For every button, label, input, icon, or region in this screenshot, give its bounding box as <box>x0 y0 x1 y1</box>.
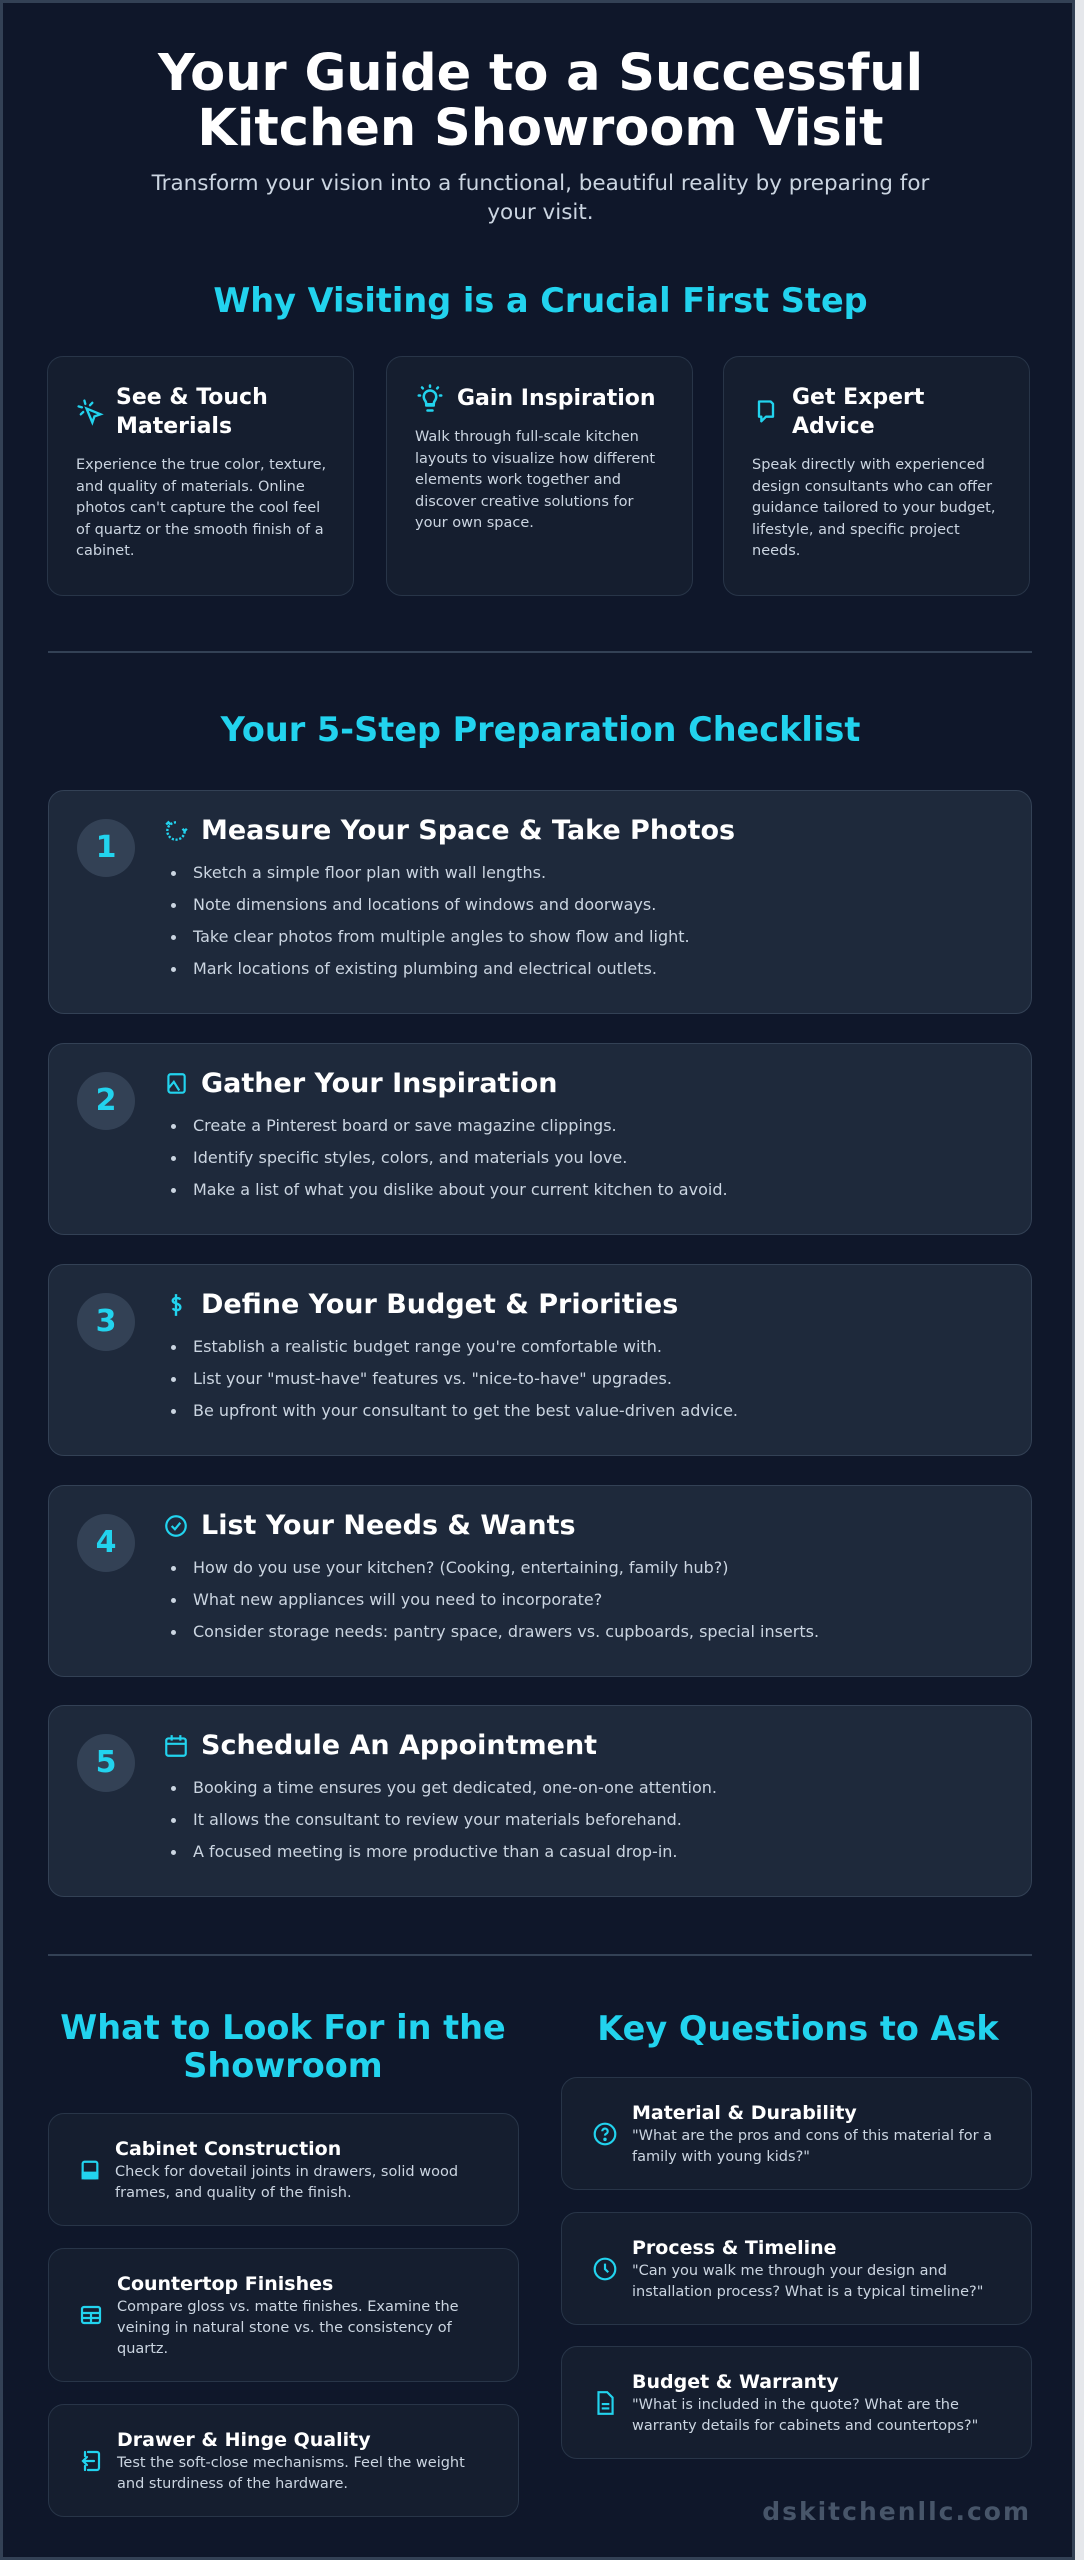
step 1: 1 <box>96 830 116 865</box>
card: expert advice <box>723 356 1030 596</box>
step 3: Establish a realistic budget range you're comfortable with. <box>193 1337 662 1356</box>
icon: enter <box>82 2450 100 2472</box>
look card: drawer: Test the soft-close mechanisms. Feel the weight and sturdiness of the hardware. <box>117 2454 465 2492</box>
heading: what to look for: What to Look For in the Showroom <box>60 2008 506 2085</box>
look card: drawer: Drawer & Hinge Quality <box>117 2428 371 2450</box>
step 1: Sketch a simple floor plan with wall lengths. <box>193 863 546 882</box>
footer: website: dskitchenllc.com <box>762 2497 1031 2526</box>
step 4: How do you use your kitchen? (Cooking, entertaining, family hub?) <box>193 1558 729 1577</box>
step 4: 4 <box>96 1525 116 1560</box>
question card: process <box>561 2212 1032 2325</box>
icon: cabinet <box>82 2160 98 2180</box>
icon: table <box>80 2306 102 2324</box>
card: expert advice: Advice <box>792 414 875 439</box>
step 5: It allows the consultant to review your materials beforehand. <box>193 1810 682 1829</box>
icon: calendar <box>165 1735 187 1757</box>
icon: chat <box>758 400 774 423</box>
icon: measure <box>166 820 188 841</box>
look card: drawer <box>48 2404 519 2517</box>
step 2: Create a Pinterest board or save magazine clippings. <box>193 1116 617 1135</box>
step 2: Identify specific styles, colors, and materials you love. <box>193 1148 627 1167</box>
question card: budget <box>561 2346 1032 2459</box>
step 3 <box>48 1264 1032 1456</box>
step 5: Schedule An Appointment <box>201 1730 597 1761</box>
step 1: Take clear photos from multiple angles to show flow and light. <box>193 927 690 946</box>
look card: cabinet: Check for dovetail joints in drawers, solid wood frames, and quality of the finish. <box>115 2164 458 2200</box>
step 5 <box>48 1705 1032 1897</box>
step 3: Define Your Budget & Priorities <box>201 1289 678 1320</box>
heading: checklist: Your 5-Step Preparation Checklist <box>221 710 860 749</box>
step 2 <box>48 1043 1032 1235</box>
heading: key questions: Key Questions to Ask <box>597 2009 999 2048</box>
step 3: 3 <box>96 1304 116 1339</box>
question card: budget: "What is included in the quote? What are the warranty details for cabinets and countertops?" <box>632 2396 978 2434</box>
step 4: List Your Needs & Wants <box>201 1510 576 1541</box>
step 1: Mark locations of existing plumbing and electrical outlets. <box>193 959 657 978</box>
step 1 <box>48 790 1032 1014</box>
question card: process: "Can you walk me through your design and installation process? What is a typical timeline?" <box>632 2262 983 2300</box>
title: Your Guide to a Successful <box>158 44 923 103</box>
step 3: Be upfront with your consultant to get the best value-driven advice. <box>193 1401 738 1420</box>
step 1: Measure Your Space & Take Photos <box>201 815 735 846</box>
title: Kitchen Showroom Visit <box>197 99 884 158</box>
card: gain inspiration: Gain Inspiration <box>457 386 656 410</box>
icon: lightbulb <box>418 384 442 412</box>
look card: countertop <box>48 2248 519 2382</box>
step 4: What new appliances will you need to incorporate? <box>193 1590 602 1609</box>
icon: image <box>167 1073 186 1094</box>
step 4: Consider storage needs: pantry space, drawers vs. cupboards, special inserts. <box>193 1622 819 1641</box>
step 5: A focused meeting is more productive than a casual drop-in. <box>193 1842 678 1861</box>
icon: cursor click <box>77 399 104 426</box>
question card: budget: Budget & Warranty <box>632 2370 839 2392</box>
icon: check circle <box>165 1515 187 1537</box>
card: see & touch: Materials <box>116 414 232 439</box>
card: see & touch: See & Touch <box>116 385 268 410</box>
question card: material: Material & Durability <box>632 2102 857 2124</box>
icon: dollar <box>172 1294 182 1316</box>
card: expert advice: Speak directly with experienced design consultants who can offer guidance tailored to your budget, lifestyle, and specific project needs. <box>752 457 995 559</box>
icon: question <box>594 2122 616 2146</box>
question card: process: Process & Timeline <box>632 2236 837 2258</box>
step 2: Gather Your Inspiration <box>201 1068 557 1099</box>
step 5: 5 <box>96 1745 116 1780</box>
card: see & touch <box>47 356 354 596</box>
look card: cabinet: Cabinet Construction <box>115 2138 341 2160</box>
step 2: 2 <box>96 1083 116 1118</box>
card: expert advice: Get Expert <box>792 385 924 410</box>
step 3: List your "must-have" features vs. "nice-to-have" upgrades. <box>193 1369 672 1388</box>
question card: material <box>561 2077 1032 2190</box>
step 1: Note dimensions and locations of windows and doorways. <box>193 895 656 914</box>
card: gain inspiration <box>386 356 693 596</box>
icon: document <box>597 2391 614 2415</box>
card: gain inspiration: Walk through full-scale kitchen layouts to visualize how different elements work together and discover creative solutions for your own space. <box>415 429 655 531</box>
look card: cabinet <box>48 2113 519 2226</box>
step 5: Booking a time ensures you get dedicated, one-on-one attention. <box>193 1778 717 1797</box>
title <box>158 44 923 158</box>
step 2: Make a list of what you dislike about your current kitchen to avoid. <box>193 1180 728 1199</box>
icon: clock <box>594 2258 616 2280</box>
card: see & touch: Experience the true color, texture, and quality of materials. Online photos can't capture the cool feel of quartz or the smooth finish of a cabinet. <box>76 457 326 559</box>
heading: why visiting: Why Visiting is a Crucial First Step <box>213 281 868 320</box>
look card: countertop: Countertop Finishes <box>117 2272 333 2294</box>
look card: countertop: Compare gloss vs. matte finishes. Examine the veining in natural stone vs. the consistency of quartz. <box>117 2298 459 2356</box>
question card: material: "What are the pros and cons of this material for a family with young kids?" <box>632 2128 992 2164</box>
subtitle: Transform your vision into a functional, beautiful reality by preparing for your visit. <box>152 171 929 225</box>
step 4 <box>48 1485 1032 1677</box>
